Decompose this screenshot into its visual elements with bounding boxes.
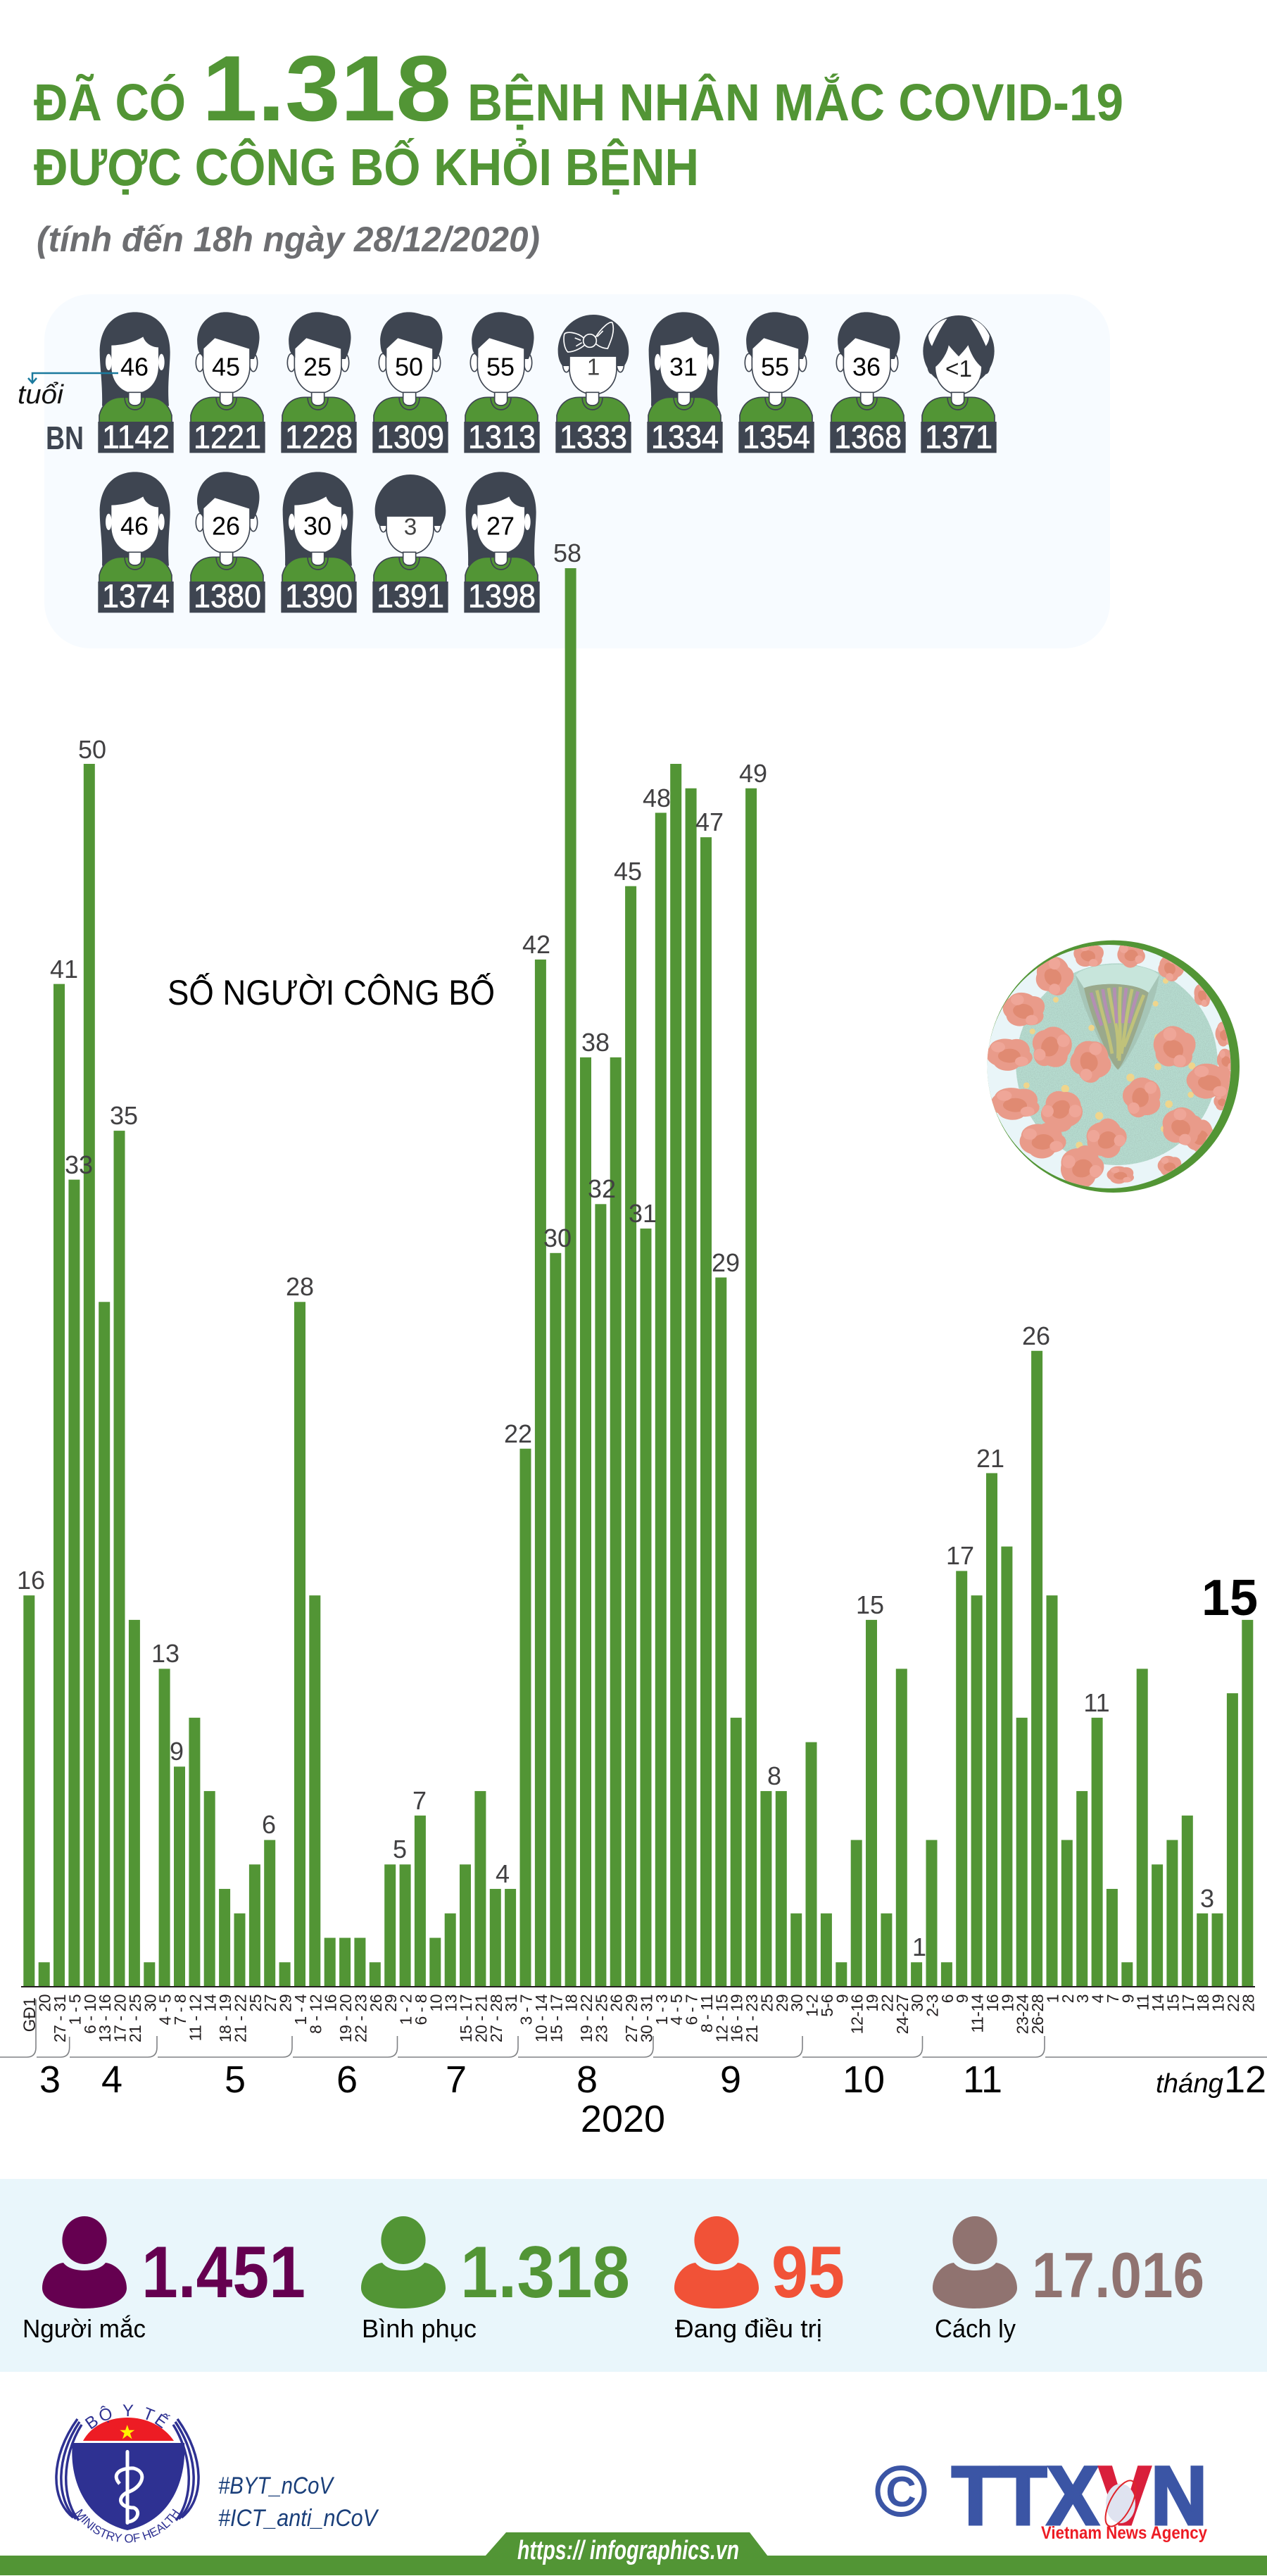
value labels: 11 (1083, 1688, 1110, 1717)
date tick labels: 2-3 (924, 1994, 942, 2017)
month labels: 9 (720, 2059, 741, 2101)
date tick labels: 11 - 12 (186, 1994, 204, 2041)
date tick labels: 23-24 (1014, 1994, 1032, 2034)
patient 1309: 50 (395, 352, 423, 381)
date tick labels: 3 (1073, 1994, 1092, 2003)
date tick labels: 11-14 (969, 1994, 987, 2033)
stat: đang điều trị (674, 2216, 845, 2343)
date tick labels: 29 (277, 1994, 295, 2012)
date tick labels: 7 - 8 (171, 1994, 189, 2025)
date tick labels: 13 - 16 (96, 1994, 114, 2042)
patient 1221: 45 (212, 352, 240, 381)
value labels: 5 (393, 1835, 407, 1864)
panel: totals (0, 2179, 1267, 2372)
value labels: 17 (946, 1541, 974, 1570)
title: 1.318 (202, 37, 451, 140)
value labels: 31 (629, 1199, 657, 1228)
date tick labels: 3 - 7 (517, 1994, 535, 2025)
patient 1391: 1391 (377, 577, 444, 614)
date tick labels: 22 - 23 (351, 1994, 370, 2042)
patient 1309 (372, 312, 448, 455)
stat: người mắc (23, 2216, 305, 2343)
date tick labels: 15 - 17 (547, 1994, 565, 2042)
value labels: 30 (543, 1224, 572, 1252)
patient 1142: 1142 (102, 419, 170, 455)
month labels: 12 (1224, 2059, 1266, 2101)
patient 1398: 27 (486, 511, 515, 540)
value labels: 15 (856, 1590, 884, 1619)
date tick labels: 1 - 4 (291, 1994, 310, 2025)
date tick labels: 18 (1194, 1994, 1212, 2012)
logo: Bộ Y Tế: MINISTRY OF HEALTH (75, 2509, 179, 2543)
date tick labels: 20 (36, 1994, 54, 2012)
date tick labels: 28 (1239, 1994, 1257, 2012)
value labels: 33 (65, 1150, 93, 1179)
hashtags: #BYT_nCoV (218, 2473, 335, 2499)
patient 1142 (98, 312, 174, 455)
date tick labels: 9 (1118, 1994, 1137, 2003)
date tick labels: 10 - 14 (532, 1994, 550, 2042)
date tick labels: 29 (382, 1994, 400, 2012)
label: BN: BN (46, 420, 84, 456)
value labels: 38 (581, 1028, 610, 1057)
patient 1371: 1371 (925, 419, 992, 455)
patient 1313: 1313 (468, 419, 536, 455)
stat: cách ly (933, 2216, 1204, 2343)
value labels: 22 (504, 1419, 532, 1448)
date tick labels: 12-16 (848, 1994, 866, 2034)
date tick labels: 26 (607, 1994, 626, 2012)
date tick labels: 17 (1179, 1994, 1197, 2012)
value labels: 28 (286, 1272, 314, 1301)
date tick labels: 26 (367, 1994, 385, 2012)
date tick labels: 1 (1043, 1994, 1061, 2003)
date tick labels: 1 - 2 (397, 1994, 415, 2025)
date tick labels: 13 (442, 1994, 460, 2012)
patient 1228: 1228 (285, 419, 353, 455)
date tick labels: 19 (1209, 1994, 1228, 2012)
date tick labels: 22 (878, 1994, 896, 2012)
date tick labels: 14 (1149, 1994, 1167, 2012)
date tick labels: 27 - 31 (51, 1994, 69, 2042)
axis label: year: 2020 (581, 2098, 665, 2140)
date tick labels: 16 (983, 1994, 1002, 2012)
patient 1333: 1 (587, 355, 600, 381)
month labels: 3 (39, 2059, 61, 2101)
logo: Bộ Y Tế: BỘ Y TẾ (84, 2404, 170, 2429)
date tick labels: 4 - 5 (667, 1994, 686, 2025)
stat: cách ly: Cách ly (935, 2314, 1016, 2343)
value labels: 35 (110, 1101, 138, 1130)
date tick labels: 27 - 28 (487, 1994, 505, 2042)
stat: bình phục: 1.318 (460, 2232, 630, 2313)
patient 1398 (464, 472, 540, 614)
month labels: 7 (446, 2059, 467, 2101)
value labels: 41 (50, 955, 78, 984)
arrow: age pointer (28, 373, 118, 383)
date tick labels: 19 - 20 (336, 1994, 355, 2042)
date tick labels: 26-28 (1028, 1994, 1047, 2034)
date tick labels: 24-27 (893, 1994, 912, 2034)
date tick labels: 27 (261, 1994, 279, 2012)
patient 1333: 1333 (560, 419, 627, 455)
bars (23, 568, 1253, 1987)
month labels: 10 (843, 2059, 885, 2101)
date tick labels: 15 - 17 (457, 1994, 475, 2042)
date tick labels: 25 (246, 1994, 265, 2012)
date tick labels: 15 (1164, 1994, 1182, 2012)
date tick labels: 31 (502, 1994, 520, 2012)
patient 1354: 55 (761, 352, 789, 381)
title (34, 37, 1123, 196)
date tick labels: 21 - 22 (231, 1994, 249, 2042)
date tick labels: 19 - 22 (577, 1994, 595, 2042)
month labels: 6 (336, 2059, 358, 2101)
date tick labels: 10 (427, 1994, 445, 2012)
patient 1374 (98, 472, 174, 614)
value labels: 26 (1022, 1321, 1050, 1350)
title: ĐƯỢC CÔNG BỐ KHỎI BỆNH (34, 138, 699, 196)
date tick labels: 20 - 21 (472, 1994, 490, 2042)
hashtags (218, 2473, 379, 2532)
patient 1368: 36 (852, 352, 881, 381)
patient 1228: 25 (303, 352, 332, 381)
month labels (39, 2059, 1266, 2101)
date tick labels: 9 (833, 1994, 851, 2003)
date tick labels: 4 (1089, 1994, 1107, 2003)
value labels: 32 (588, 1174, 616, 1203)
logo: TTXVN: Vietnam News Agency (1041, 2523, 1207, 2543)
value labels: 29 (712, 1248, 740, 1277)
patient 1391 (372, 475, 448, 614)
value labels (17, 539, 1214, 1961)
date tick labels: 8 - 12 (306, 1994, 324, 2034)
value labels: 7 (412, 1786, 427, 1815)
date tick labels: 17 - 20 (111, 1994, 130, 2042)
date tick labels: 30 (908, 1994, 926, 2012)
patient 1380: 26 (212, 511, 240, 540)
stat: bình phục (361, 2216, 630, 2343)
logo: TTXVN: TTXVN (952, 2450, 1207, 2543)
date tick labels: 19 (863, 1994, 881, 2012)
stat: đang điều trị: Đang điều trị (675, 2314, 822, 2343)
stat: đang điều trị: 95 (771, 2232, 845, 2313)
patient 1398: 1398 (468, 577, 536, 614)
chart heading: SỐ NGƯỜI CÔNG BỐ (168, 972, 495, 1012)
logo: TTXVN: C (885, 2468, 916, 2515)
patient 1334: 31 (669, 352, 698, 381)
date tick labels: 27 - 29 (622, 1994, 641, 2042)
hashtags: #ICT_anti_nCoV (218, 2505, 379, 2532)
value labels: 9 (170, 1737, 184, 1766)
date tick labels: 9 (953, 1994, 971, 2003)
date tick labels: 16 - 19 (728, 1994, 746, 2042)
date tick labels: 30 (141, 1994, 159, 2012)
month labels: 8 (576, 2059, 598, 2101)
date tick labels: 2 (1059, 1994, 1077, 2003)
patient 1354: 1354 (743, 419, 810, 455)
date tick labels: 6 - 10 (81, 1994, 99, 2034)
patient 1313 (464, 312, 540, 455)
highlighted latest value: 15 (1202, 1570, 1258, 1626)
date tick labels: GĐ1 (20, 1997, 39, 2032)
patient 1371 (921, 315, 997, 455)
patient 1380: 1380 (194, 577, 261, 614)
patient 1334 (647, 312, 723, 455)
date tick labels: 7 (1104, 1994, 1122, 2003)
value labels: 16 (17, 1566, 45, 1595)
date tick labels (20, 1994, 1257, 2042)
value labels: 21 (976, 1444, 1004, 1473)
value labels: 48 (643, 784, 671, 812)
footer bar: https:// infographics.vn (517, 2536, 739, 2565)
value labels: 47 (695, 808, 724, 836)
date tick labels: 18 (562, 1994, 581, 2012)
patient 1221: 1221 (194, 419, 261, 455)
month labels: 4 (101, 2059, 122, 2101)
value labels: 3 (1200, 1884, 1214, 1913)
value labels: 45 (614, 857, 642, 886)
patient 1371: <1 (945, 356, 972, 382)
value labels: 42 (522, 930, 550, 959)
patient 1391: 3 (404, 515, 417, 541)
date tick labels: 16 (322, 1994, 340, 2012)
date tick labels: 14 (201, 1994, 220, 2012)
month labels: 5 (225, 2059, 246, 2101)
date tick labels: 30 (788, 1994, 806, 2012)
date tick labels: 1 - 5 (65, 1994, 84, 2025)
month brackets (0, 1999, 1267, 2057)
date tick labels: 1-2 (802, 1994, 821, 2017)
patient 1354 (738, 312, 814, 455)
date tick labels: 8 - 11 (698, 1994, 716, 2032)
value labels: 6 (262, 1810, 276, 1839)
date tick labels: 11 (1134, 1994, 1152, 2011)
date tick labels: 23 - 25 (592, 1994, 610, 2042)
patient 1390 (281, 472, 357, 614)
patient 1374: 1374 (102, 577, 170, 614)
value labels: 13 (151, 1639, 179, 1668)
patient 1309: 1309 (377, 419, 444, 455)
patient 1142: 46 (120, 352, 149, 381)
month labels: 11 (963, 2059, 1002, 2101)
patient 1368 (830, 312, 906, 455)
axis label: tháng: tháng (1156, 2069, 1223, 2099)
bar chart (0, 539, 1267, 2140)
date tick labels: 19 (998, 1994, 1016, 2012)
date tick labels: 6 - 7 (683, 1994, 701, 2025)
date tick labels: 6 - 8 (412, 1994, 430, 2025)
patient 1221 (189, 312, 265, 455)
patient 1313: 55 (486, 352, 515, 381)
stat: người mắc: 1.451 (141, 2232, 305, 2313)
patient 1390: 30 (303, 511, 332, 540)
value labels: 50 (78, 735, 106, 764)
patient 1390: 1390 (285, 577, 353, 614)
date tick labels: 30 - 31 (638, 1994, 656, 2042)
label: tuổi: tuổi (18, 380, 65, 410)
date tick labels: 5-6 (818, 1994, 836, 2017)
date tick labels: 21 - 25 (126, 1994, 144, 2042)
patient 1380 (189, 472, 265, 614)
footer bar (0, 2532, 1267, 2575)
logo: Bộ Y Tế (55, 2404, 200, 2543)
patient 1334: 1334 (651, 419, 719, 455)
date tick labels: 22 (1224, 1994, 1242, 2012)
patient 1374: 46 (120, 511, 149, 540)
date tick labels: 25 (757, 1994, 776, 2012)
subtitle: (tính đến 18h ngày 28/12/2020) (37, 220, 540, 259)
date tick labels: 6 (938, 1994, 957, 2003)
illustration: virus (983, 938, 1240, 1195)
patient 1228 (281, 312, 357, 455)
title: BỆNH NHÂN MẮC COVID-19 (467, 73, 1123, 132)
value labels: 49 (739, 759, 767, 788)
value labels: 1 (912, 1933, 926, 1961)
date tick labels: 4 - 5 (156, 1994, 175, 2025)
date tick labels: 18 - 19 (216, 1994, 234, 2042)
panel: patients (44, 294, 1110, 648)
patient 1333 (555, 315, 631, 455)
date tick labels: 21 - 23 (743, 1994, 761, 2042)
date tick labels: 29 (773, 1994, 791, 2012)
date tick labels: 1 - 3 (653, 1994, 671, 2025)
stat: người mắc: Người mắc (23, 2314, 146, 2343)
patient 1368: 1368 (834, 419, 902, 455)
stat: bình phục: Bình phục (362, 2314, 477, 2343)
value labels: 4 (496, 1859, 510, 1888)
title: ĐÃ CÓ (34, 73, 186, 132)
value labels: 8 (767, 1761, 781, 1790)
date tick labels: 12 - 15 (712, 1994, 731, 2042)
stat: cách ly: 17.016 (1032, 2240, 1204, 2311)
value labels: 58 (553, 539, 581, 567)
